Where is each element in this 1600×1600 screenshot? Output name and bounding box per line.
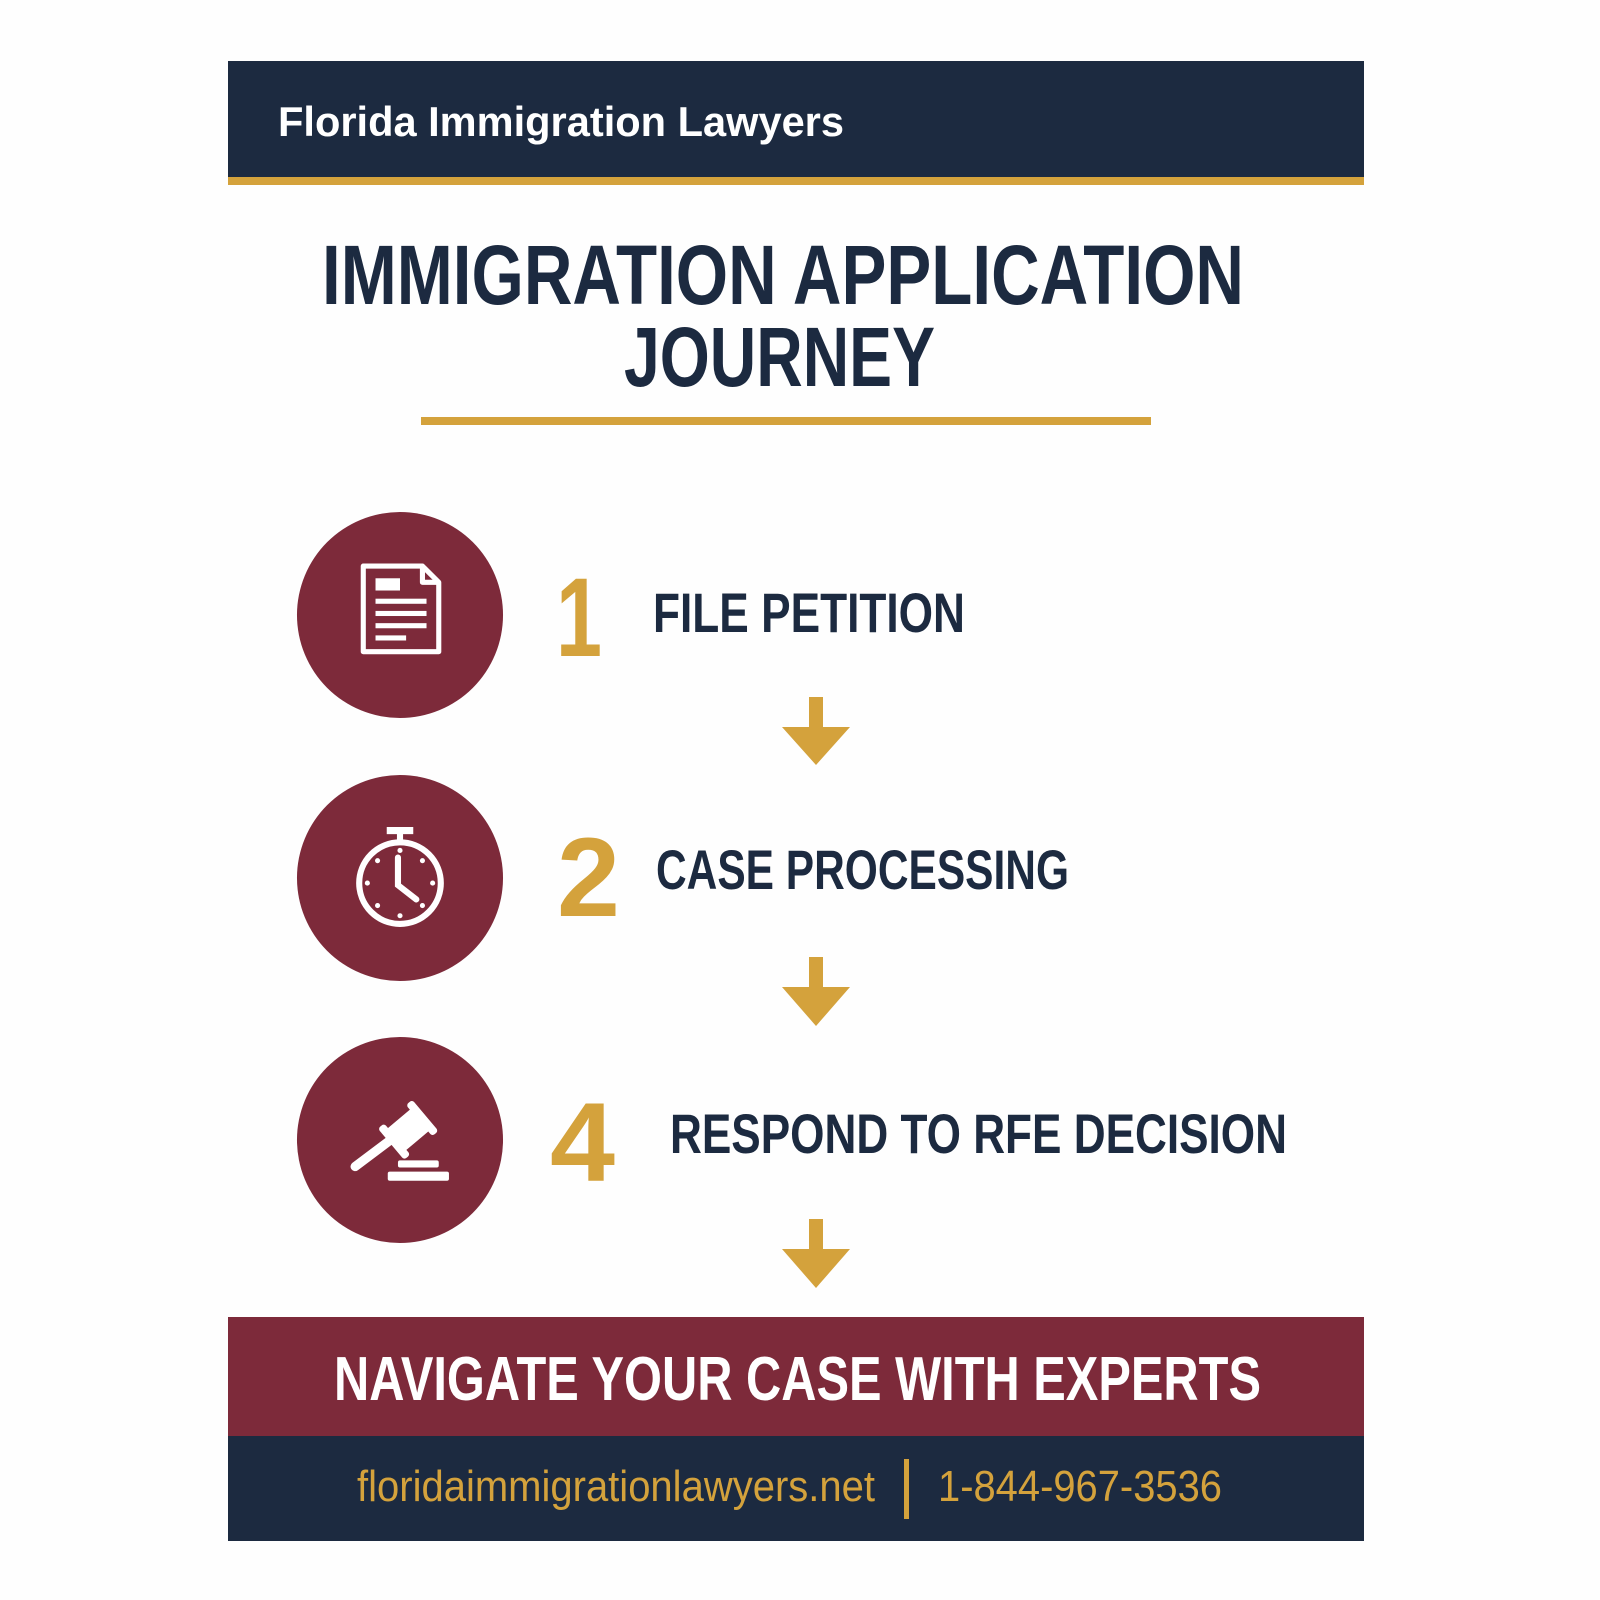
step 1: file petition [297, 512, 965, 718]
icon: stopwatch [297, 775, 503, 981]
step 4: respond to RFE decision [297, 1037, 1287, 1243]
arrow 1 [782, 697, 850, 765]
icon: gavel [297, 1037, 503, 1243]
step label: RESPOND TO RFE DECISION [670, 1102, 1287, 1165]
footer contact bar [228, 1436, 1364, 1541]
call to action banner [228, 1317, 1364, 1437]
arrow 2 [782, 957, 850, 1026]
footer contact bar: floridaimmigrationlawyers.net [357, 1462, 875, 1511]
footer contact bar: 1-844-967-3536 [938, 1462, 1222, 1511]
step number 1: 1 [556, 555, 602, 680]
title [322, 228, 1244, 404]
arrow 3 [782, 1219, 850, 1288]
title: JOURNEY [624, 310, 935, 404]
step number 2: 2 [557, 815, 620, 940]
icon: document [297, 512, 503, 718]
call to action banner: NAVIGATE YOUR CASE WITH EXPERTS [334, 1345, 1261, 1414]
header bar: Florida Immigration Lawyers [278, 98, 844, 145]
step label: FILE PETITION [653, 581, 965, 644]
title: IMMIGRATION APPLICATION [322, 228, 1244, 322]
step number 4: 4 [550, 1080, 615, 1205]
step 2: case processing [297, 775, 1069, 981]
header bar [228, 61, 1364, 185]
step label: CASE PROCESSING [656, 838, 1069, 901]
title underline [421, 417, 1151, 425]
